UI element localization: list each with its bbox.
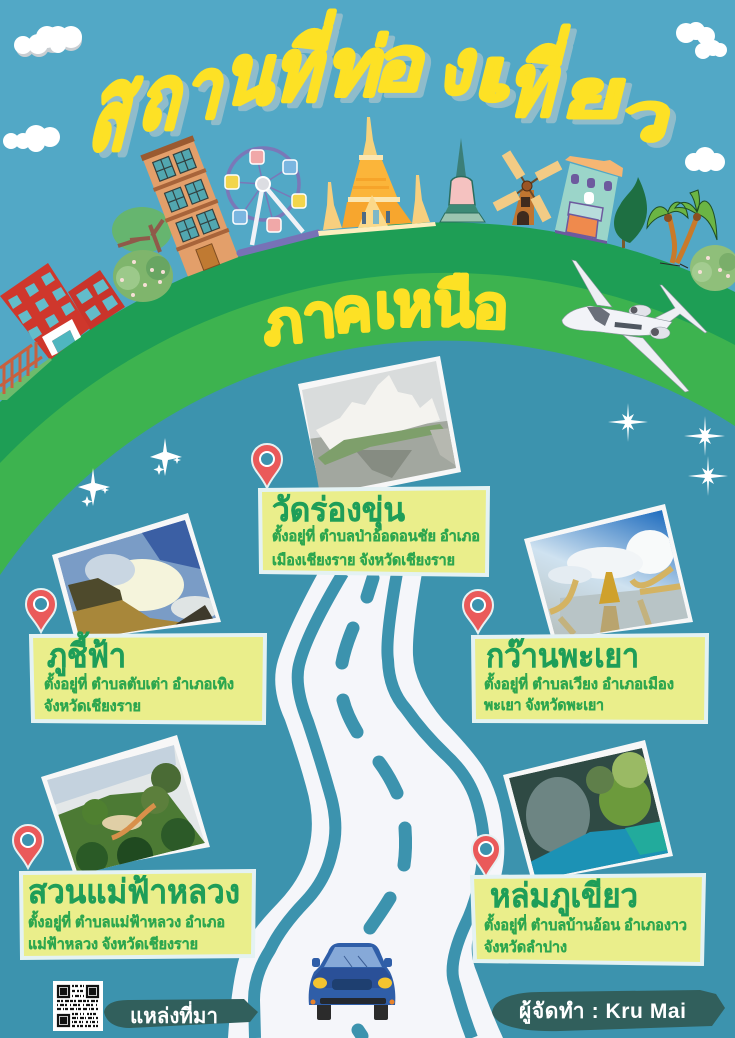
hill: light green band [0, 273, 735, 1038]
photo: Wat Rong Khun [298, 356, 461, 488]
card: ภูชี้ฟ้า [31, 631, 265, 723]
region heading: ภาคเหนือ: ค [330, 276, 374, 345]
cloud 2 [676, 22, 727, 59]
road [228, 573, 504, 1038]
title: สถานที่ท่องเที่ยว: อ [368, 22, 438, 107]
title: สถานที่ท่องเที่ยว: ที่ [502, 24, 575, 133]
region heading: ภาคเหนือ: ห [393, 271, 433, 338]
card: กว๊านพะเยา: พะเยา จังหวัดพะเยา [484, 697, 604, 714]
cloud 3 [3, 125, 60, 152]
windmill [495, 153, 560, 225]
car [309, 943, 395, 1020]
title: สถานที่ท่องเที่ยว [81, 9, 688, 178]
palm trees [647, 190, 717, 268]
card text: ตั้งอยู่ที่ ตำบลป่าอ้อดอนชัย อำเภอ [272, 524, 480, 546]
region heading: ภาคเหนือ: ภ [259, 287, 306, 358]
title: สถานที่ท่องเที่ยว: ถ [138, 53, 203, 152]
title: สถานที่ท่องเที่ยว: ย [562, 63, 643, 136]
title: สถานที่ท่องเที่ยว: ว [619, 85, 688, 159]
photo: Mae Fah Luang garden [41, 735, 210, 875]
title: สถานที่ท่องเที่ยว: ส [87, 50, 157, 178]
sparkles [78, 403, 728, 507]
road edge stripes [254, 573, 484, 1038]
pin: Phu Chi Fa [26, 589, 56, 632]
card text: ตั้งอยู่ที่ ตำบลตับเต่า อำเภอเทิง [44, 672, 234, 694]
airplane [562, 260, 707, 392]
brown tower [140, 135, 239, 277]
photo: Phu Chi Fa [52, 513, 221, 634]
button: แหล่งที่มา [104, 999, 258, 1028]
region heading: ภาคเหนือ: า [300, 282, 339, 351]
region heading: ภาคเหนือ: นื [433, 271, 475, 339]
cypress [614, 177, 647, 248]
card text: ตั้งอยู่ที่ ตำบลบ้านอ้อน อำเภองาว [484, 913, 687, 935]
title: สถานที่ท่องเที่ยว: ท่ [327, 29, 401, 118]
tree [112, 207, 172, 253]
road centre dashes [342, 578, 406, 1036]
title: สถานที่ท่องเที่ยว: ถ [132, 48, 197, 147]
title: สถานที่ท่องเที่ยว: ว [613, 80, 682, 154]
card text: ตั้งอยู่ที่ ตำบลเวียง อำเภอเมือง [484, 672, 674, 694]
ground: blue [0, 341, 735, 1038]
card title: ภูชี้ฟ้า [47, 631, 126, 677]
card: ภูชี้ฟ้า: จังหวัดเชียงราย [44, 698, 141, 715]
card: สวนแม่ฟ้าหลวง [21, 871, 254, 958]
region heading: ภาคเหนือ: อ [472, 273, 510, 341]
title: สถานที่ท่องเที่ยว: ที่ [274, 14, 347, 123]
title: สถานที่ท่องเที่ยว: อ [374, 27, 444, 112]
title: สถานที่ท่องเที่ยว: เ [474, 40, 532, 121]
temple [318, 117, 436, 236]
card title: วัดร่องขุ่น [272, 493, 405, 531]
ferris wheel [225, 148, 318, 253]
mint house [555, 156, 623, 244]
card: วัดร่องขุ่น: เมืองเชียงราย จังหวัดเชียงราย [272, 552, 455, 569]
title: สถานที่ท่องเที่ยว: เ [468, 35, 526, 116]
title: สถานที่ท่องเที่ยว: ที่ [508, 29, 581, 138]
red building [0, 263, 125, 360]
title: สถานที่ท่องเที่ยว: ง [439, 29, 494, 114]
cloud 4 [685, 147, 725, 172]
card title: หล่มภูเขียว [490, 878, 638, 917]
button: แหล่งที่มา: แหล่งที่มา [130, 1000, 218, 1028]
title: สถานที่ท่องเที่ยว: ย [556, 58, 637, 131]
card: สวนแม่ฟ้าหลวง: แม่ฟ้าหลวง จังหวัดเชียงราย [28, 936, 198, 953]
region heading: ภาคเหนือ: เ [374, 273, 396, 340]
button: ผู้จัดทำ: ผู้จัดทำ : Kru Mai [519, 999, 686, 1025]
pin: Lum Phu Khiao [472, 835, 500, 877]
title: สถานที่ท่องเที่ยว: ท่ [321, 24, 395, 113]
cloud 1 [14, 26, 82, 57]
title: สถานที่ท่องเที่ยว: น [224, 33, 296, 126]
region heading: ภาคเหนือ [259, 271, 510, 358]
card: วัดร่องขุ่น [260, 488, 488, 575]
bush left [113, 250, 173, 302]
title: สถานที่ท่องเที่ยว: า [183, 48, 243, 140]
fence [0, 342, 52, 400]
card: หล่มภูเขียว: จังหวัดลำปาง [484, 939, 567, 956]
clouds [3, 22, 727, 172]
card title: กว๊านพะเยา [486, 638, 639, 675]
QR code [53, 981, 103, 1031]
title: สถานที่ท่องเที่ยว: า [177, 43, 237, 135]
pin: Mae Fah Luang [13, 825, 43, 868]
card: หล่มภูเขียว [472, 875, 704, 964]
title: สถานที่ท่องเที่ยว: ส [81, 45, 151, 173]
card text: ตั้งอยู่ที่ ตำบลแม่ฟ้าหลวง อำเภอ [28, 910, 225, 932]
hill: dark green [0, 222, 735, 1038]
title: สถานที่ท่องเที่ยว: ที่ [268, 9, 341, 118]
card: กว๊านพะเยา [473, 635, 707, 722]
pin: Wat Rong Khun [252, 444, 282, 488]
bush right [690, 245, 735, 291]
title: สถานที่ท่องเที่ยว: ง [433, 24, 488, 109]
card title: สวนแม่ฟ้าหลวง [28, 875, 240, 911]
photo: Kwan Phayao [524, 504, 693, 640]
pin: Kwan Phayao [463, 590, 493, 633]
photo: Lum Phu Khiao [503, 740, 673, 885]
green chedi [440, 138, 485, 222]
button: ผู้จัดทำ [492, 990, 725, 1031]
title: สถานที่ท่องเที่ยว: น [218, 28, 290, 121]
